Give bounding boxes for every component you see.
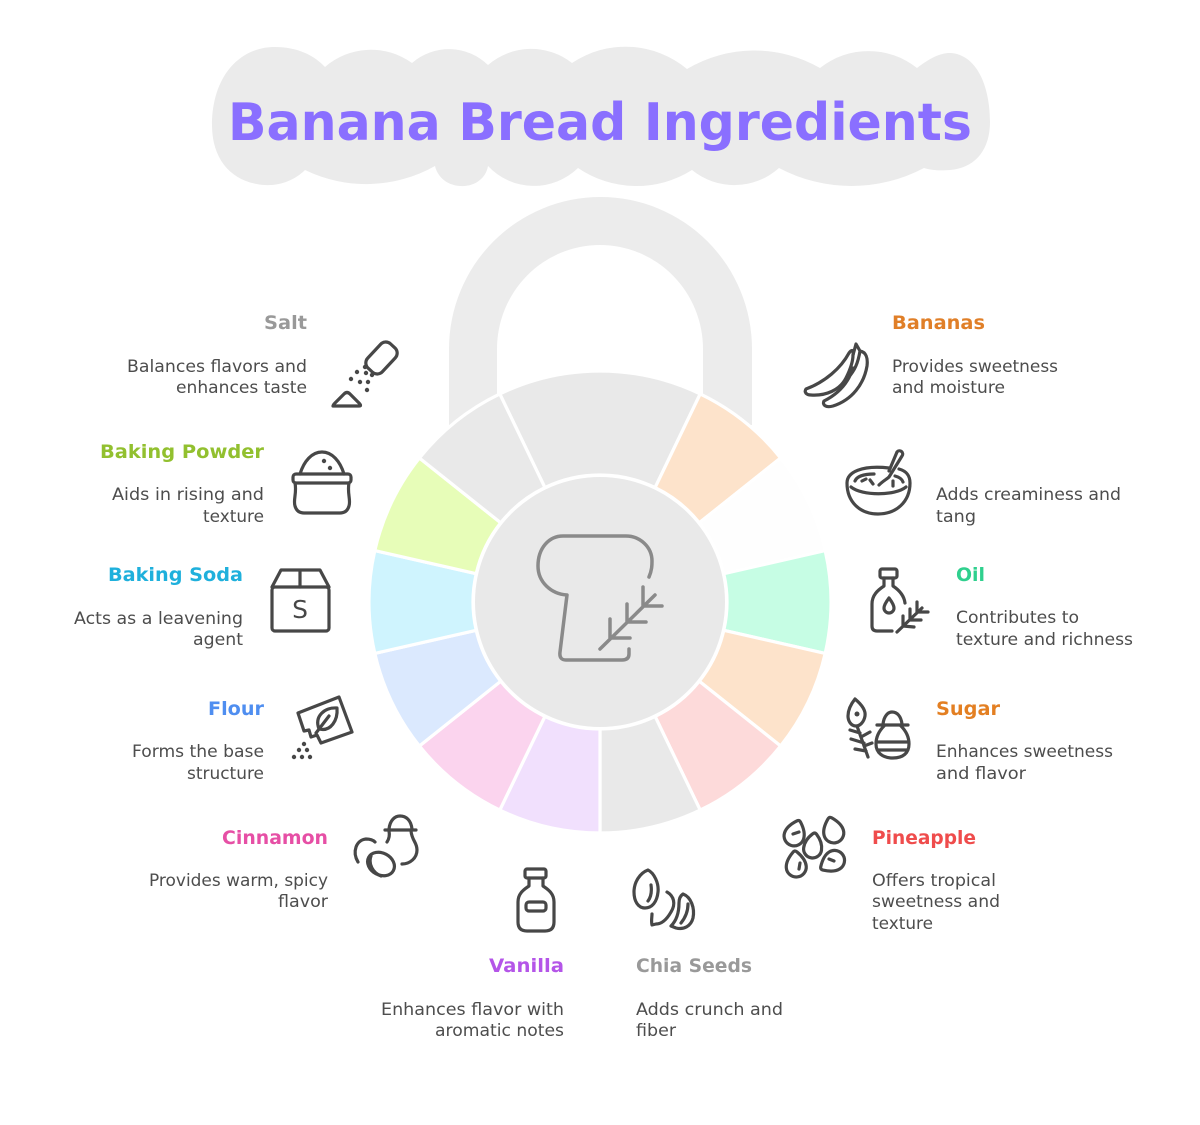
wheel of ingredient segments [369,371,831,833]
label: cinnamon: Provides warm, spicy [149,871,328,890]
segment: oil [724,551,831,653]
segment: cinnamon [419,681,545,810]
label: baking soda: Baking Soda [108,564,243,586]
label: pineapple: Pineapple [872,827,976,849]
label: pineapple [872,827,1000,933]
label: sugar: Sugar [936,698,1001,720]
label: salt: Salt [264,312,307,334]
icon: oil bottle with herb [872,569,928,632]
lock shackle [449,197,752,425]
segment: top lock body [500,371,700,488]
icon: pineapple seeds [781,815,848,878]
label: bananas: Bananas [892,312,985,334]
label: salt: Balances flavors and [127,357,307,376]
icon: vanilla bottle [518,869,554,931]
centre hub circle [475,477,725,727]
icon: flour packet [292,697,352,759]
label: vanilla: Enhances flavor with [381,1000,564,1019]
icon: salt shaker [333,339,400,406]
label: creamy ingredient [936,485,1121,526]
label: pineapple: sweetness and [872,892,1000,911]
segment: bananas [655,394,781,523]
label: cinnamon [149,827,328,911]
segment: sugar [699,630,825,746]
label: chia seeds: fiber [636,1021,676,1040]
segment: baking powder [375,458,501,574]
icon: baking soda box [272,570,329,631]
label: baking soda: Acts as a leavening [74,609,243,628]
label: vanilla: Vanilla [489,955,564,977]
icon: bowl with spoon [847,451,910,514]
segment: baking soda [369,551,476,653]
segment: vanilla [500,716,600,833]
label: sugar: and flavor [936,764,1026,783]
title: Banana Bread Ingredients [228,93,972,153]
label: oil: texture and richness [956,630,1133,649]
icon: baking soda box: S [292,595,308,624]
label: flour: Forms the base [132,742,264,761]
segment: pineapple [655,681,781,810]
label: flour [132,698,265,783]
label: salt: enhances taste [176,378,307,397]
label: cinnamon: Cinnamon [222,827,328,849]
label: flour: structure [187,764,264,783]
label: baking soda: agent [193,630,244,649]
label: bananas: and moisture [892,378,1005,397]
icon: sugar shaker and wheat [848,699,909,758]
label: oil [956,564,1133,649]
label: oil: Contributes to [956,608,1079,627]
label: baking powder: Aids in rising and [112,485,264,504]
label: flour: Flour [208,698,265,720]
label: sugar [936,698,1113,783]
icon: bread with rosemary [538,536,662,660]
label: oil: Oil [956,564,985,586]
icon: bananas [805,344,867,407]
label: baking powder: Baking Powder [100,441,265,463]
label: chia seeds [636,955,783,1040]
icon: cinnamon shaker and seed [355,816,417,880]
label: salt [127,312,307,397]
label: bananas: Provides sweetness [892,357,1058,376]
label: pineapple: texture [872,914,933,933]
label: creamy ingredient: tang [936,507,976,526]
segment: creamy ingredient [699,458,825,574]
title banner cloud [212,47,990,186]
segment: salt [419,394,545,523]
label: vanilla: aromatic notes [435,1021,564,1040]
segment: chia seeds [600,716,700,833]
icon: chia seeds [634,870,694,929]
label: cinnamon: flavor [278,892,328,911]
label: vanilla [381,955,564,1040]
label: bananas [892,312,1058,397]
icon: baking powder bag [293,452,351,513]
label: chia seeds: Adds crunch and [636,1000,783,1019]
label: baking powder: texture [203,507,264,526]
label: pineapple: Offers tropical [872,871,996,890]
label: chia seeds: Chia Seeds [636,955,752,977]
segment: flour [375,630,501,746]
label: baking soda [74,564,244,649]
label: baking powder [100,441,265,526]
label: sugar: Enhances sweetness [936,742,1113,761]
label: creamy ingredient: Adds creaminess and [936,485,1121,504]
